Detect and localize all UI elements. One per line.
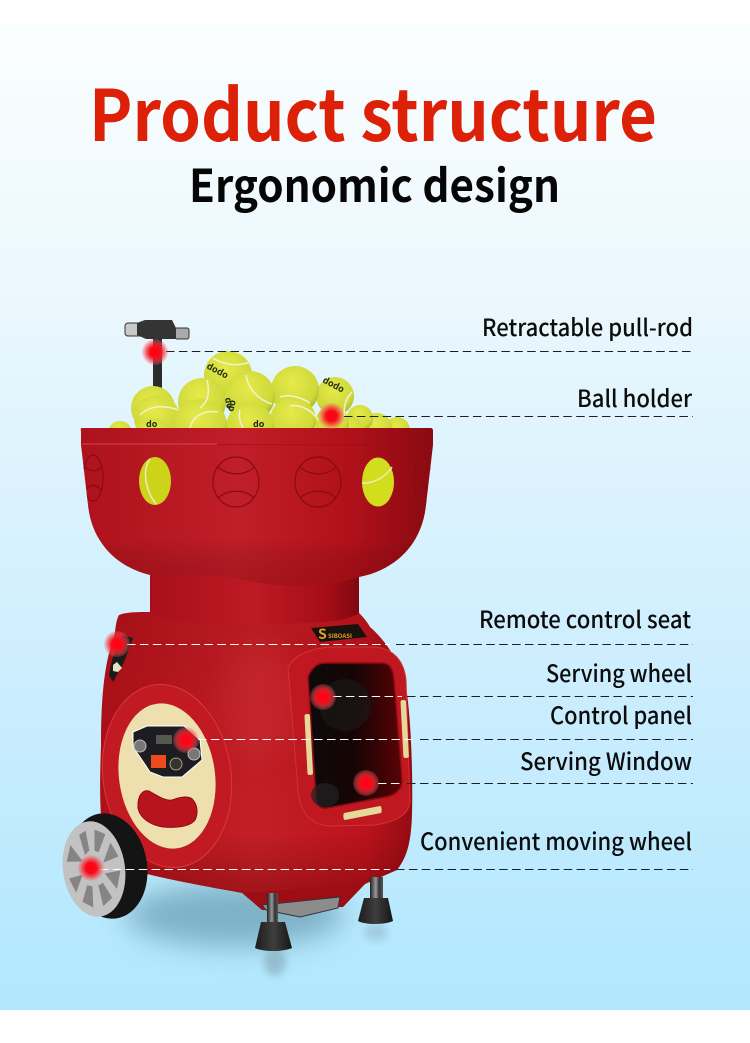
tennis balls: do (253, 417, 265, 430)
serving window (288, 647, 410, 826)
moving wheel (57, 807, 156, 925)
label: serving window: Serving Window (520, 743, 692, 777)
hotspot markers (78, 339, 379, 881)
carry handle (138, 791, 197, 827)
floor shadow (125, 883, 388, 976)
support feet (242, 877, 393, 951)
brand badge: SIBOASI (328, 631, 352, 640)
control panel disc (91, 676, 243, 876)
retractable pull-rod (125, 320, 189, 390)
machine body (100, 612, 412, 907)
tennis balls: do (223, 398, 239, 413)
label: ball holder: Ball holder (577, 380, 692, 414)
right ball window (362, 458, 394, 506)
left ball window (139, 457, 171, 505)
label: retractable pull-rod: Retractable pull-rod (482, 309, 693, 343)
tennis balls: dodo (205, 359, 231, 382)
label: remote control seat: Remote control seat (479, 601, 691, 635)
label: serving wheel: Serving wheel (546, 655, 692, 689)
neck (150, 560, 359, 624)
control panel (133, 726, 202, 777)
subtitle: Ergonomic design (189, 150, 560, 215)
tennis balls: do (222, 396, 237, 410)
label: convenient moving wheel: Convenient moving wheel (420, 823, 692, 857)
tennis balls: dodo (321, 373, 347, 396)
title: Product structure (89, 60, 657, 162)
ball holder bowl (81, 428, 433, 586)
brand badge (311, 624, 367, 644)
leader lines (100, 352, 693, 870)
tennis balls (109, 351, 410, 428)
brand badge: S (318, 624, 327, 644)
label: control panel: Control panel (550, 697, 692, 731)
tennis balls: do (146, 417, 158, 430)
embossed ball icons (83, 455, 432, 507)
remote control seat (109, 635, 133, 682)
